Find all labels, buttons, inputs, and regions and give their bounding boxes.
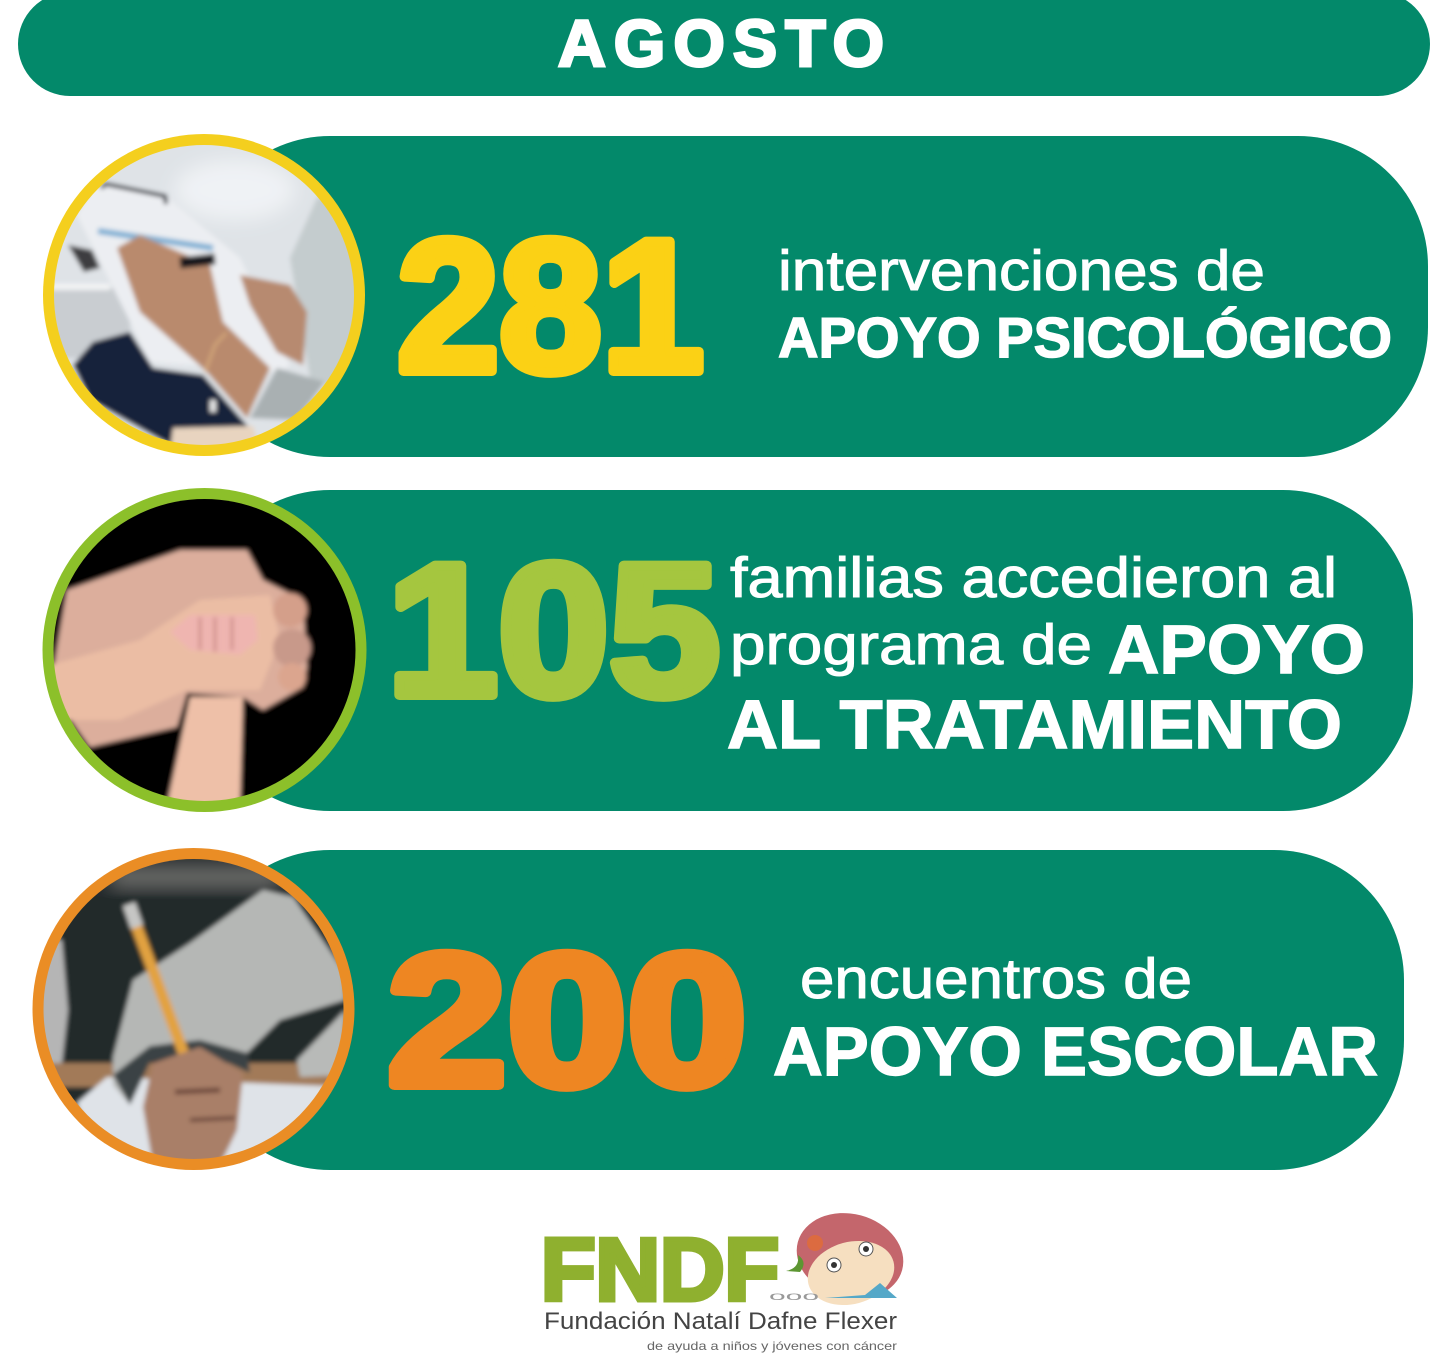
- logo name: Fundación Natalí Dafne Flexer: [544, 1308, 897, 1335]
- title banner: AGOSTO: AGOSTO: [558, 6, 884, 80]
- panel background: [200, 136, 1428, 457]
- text: encuentros de apoyo escolar: encuentros de: [800, 947, 1192, 1011]
- text: familias accedieron al programa de apoyo al tratamiento: APOYO: [1108, 611, 1365, 688]
- logo: Fundación Natalí Dafne Flexer: [541, 1201, 913, 1353]
- text: encuentros de apoyo escolar: APOYO ESCOLAR: [773, 1013, 1378, 1090]
- number: 105: 105: [387, 525, 720, 735]
- text: familias accedieron al programa de apoyo al tratamiento: AL TRATAMIENTO: [727, 686, 1342, 763]
- photo: child hand holding a pencil: [32, 848, 354, 1170]
- text: encuentros de apoyo escolar: [773, 947, 1378, 1090]
- logo character: girl with a red hat: [769, 1201, 913, 1314]
- panel background: [200, 490, 1413, 811]
- photo: adult hands holding a baby hand: [42, 488, 366, 812]
- text: intervenciones de apoyo psicológico: [778, 239, 1392, 370]
- photo: hands writing on a clipboard: [43, 134, 370, 456]
- panel background: [200, 850, 1404, 1170]
- logo tagline: de ayuda a niños y jóvenes con cáncer: [647, 1339, 897, 1353]
- text: intervenciones de apoyo psicológico: APOYO PSICOLÓGICO: [778, 306, 1392, 370]
- logo character: girl with a red hat: ooo: [769, 1289, 820, 1303]
- number: 200: 200: [387, 915, 747, 1125]
- logo wordmark: FNDF: FNDF: [541, 1220, 779, 1319]
- number: 281: 281: [397, 201, 704, 411]
- panel: apoyo psicológico: [43, 134, 1428, 457]
- panel: apoyo al tratamiento: [42, 488, 1413, 812]
- text: familias accedieron al programa de apoyo al tratamiento: programa de: [730, 613, 1092, 677]
- title banner: AGOSTO: [18, 0, 1430, 96]
- panel: apoyo escolar: [32, 848, 1404, 1170]
- text: familias accedieron al programa de apoyo al tratamiento: [727, 546, 1365, 763]
- text: familias accedieron al programa de apoyo al tratamiento: familias accedieron al: [730, 546, 1337, 610]
- text: intervenciones de apoyo psicológico: intervenciones de: [778, 239, 1265, 303]
